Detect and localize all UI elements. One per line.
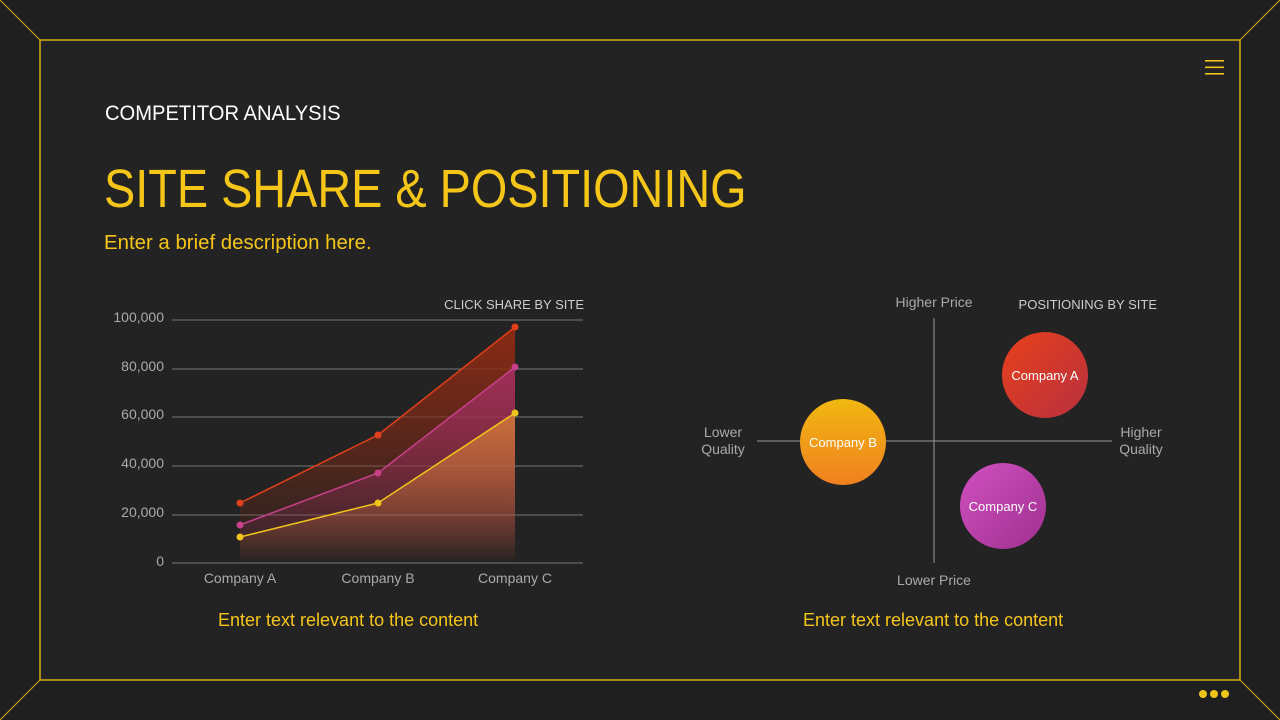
positioning chart (701, 294, 1163, 588)
area chart: Company C (478, 570, 552, 586)
positioning chart: Company A (1011, 368, 1079, 383)
positioning chart: Company B (809, 435, 877, 450)
area chart: CLICK SHARE BY SITE (444, 297, 584, 312)
positioning chart: Quality (1119, 441, 1163, 457)
positioning chart: Higher Price (895, 294, 973, 310)
area chart: 20,000 (121, 504, 164, 520)
icon: dots (1199, 690, 1229, 698)
area chart: 0 (156, 553, 164, 569)
area chart: Company B (341, 570, 415, 586)
positioning chart: Quality (701, 441, 745, 457)
caption left: Enter text relevant to the content (218, 610, 478, 630)
positioning chart: POSITIONING BY SITE (1019, 297, 1157, 312)
positioning chart: Higher (1120, 424, 1162, 440)
title: SITE SHARE & POSITIONING (104, 159, 747, 219)
positioning chart: Lower (704, 424, 742, 440)
icon: menu (1205, 60, 1224, 75)
positioning chart: Lower Price (897, 572, 971, 588)
area chart (113, 297, 584, 586)
description: Enter a brief description here. (104, 232, 372, 254)
subtitle: COMPETITOR ANALYSIS (105, 102, 341, 125)
area chart: 60,000 (121, 406, 164, 422)
area chart: 40,000 (121, 455, 164, 471)
area chart: 100,000 (113, 309, 164, 325)
positioning chart: Company C (969, 499, 1037, 514)
area chart: 80,000 (121, 358, 164, 374)
area chart: Company A (204, 570, 277, 586)
caption right: Enter text relevant to the content (803, 610, 1063, 630)
